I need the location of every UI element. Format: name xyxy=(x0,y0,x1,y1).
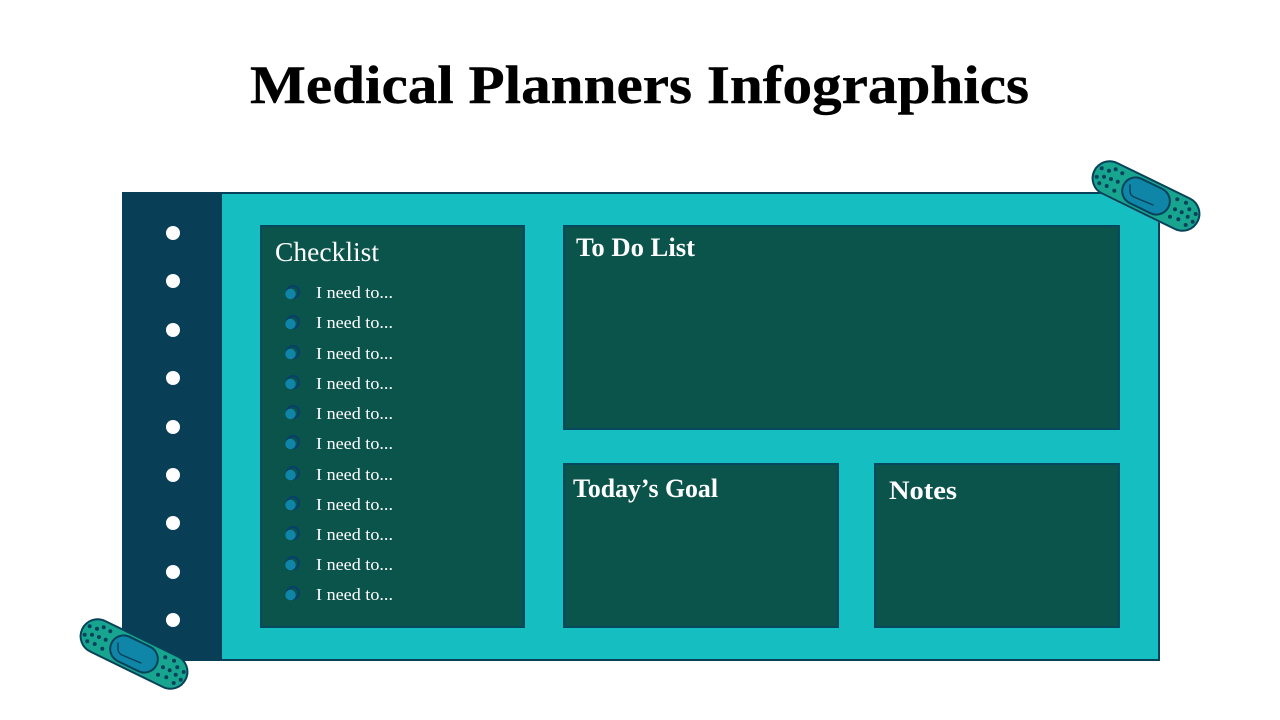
icon: bandage top right xyxy=(1087,156,1206,238)
checklist item 5 xyxy=(285,404,393,423)
checklist item 9 xyxy=(285,525,393,544)
notes heading: Notes xyxy=(889,476,957,505)
checklist item 3: I need to... xyxy=(316,344,393,363)
checklist item 7: I need to... xyxy=(316,465,393,484)
checklist item 9: I need to... xyxy=(316,525,393,544)
checklist item 6 xyxy=(285,434,393,453)
checklist item 10 xyxy=(285,555,393,574)
panel: checklist xyxy=(261,226,524,627)
panel: to do list xyxy=(564,226,1119,429)
checklist item 11: I need to... xyxy=(316,585,393,604)
checklist item 5: I need to... xyxy=(316,404,393,423)
checklist item 3 xyxy=(285,344,393,363)
today's goal heading: Today’s Goal xyxy=(573,474,718,503)
panel: today's goal xyxy=(564,464,838,627)
checklist item 7 xyxy=(285,465,393,484)
icon: bandage bottom left xyxy=(75,614,194,696)
checklist item 2 xyxy=(285,313,393,332)
planner board xyxy=(122,192,1159,661)
checklist item 8 xyxy=(285,495,393,514)
checklist item 4 xyxy=(285,374,393,393)
binding strip with holes xyxy=(122,192,222,661)
checklist item 11 xyxy=(285,585,393,604)
title: Medical Planners Infographics xyxy=(250,55,1029,115)
to do list heading: To Do List xyxy=(576,233,695,262)
checklist heading: Checklist xyxy=(275,237,379,267)
checklist item 10: I need to... xyxy=(316,555,393,574)
checklist item 6: I need to... xyxy=(316,434,393,453)
checklist item 2: I need to... xyxy=(316,313,393,332)
checklist item 4: I need to... xyxy=(316,374,393,393)
checklist item 1 xyxy=(285,283,393,302)
checklist item 8: I need to... xyxy=(316,495,393,514)
panel: notes xyxy=(875,464,1119,627)
checklist item 1: I need to... xyxy=(316,283,393,302)
